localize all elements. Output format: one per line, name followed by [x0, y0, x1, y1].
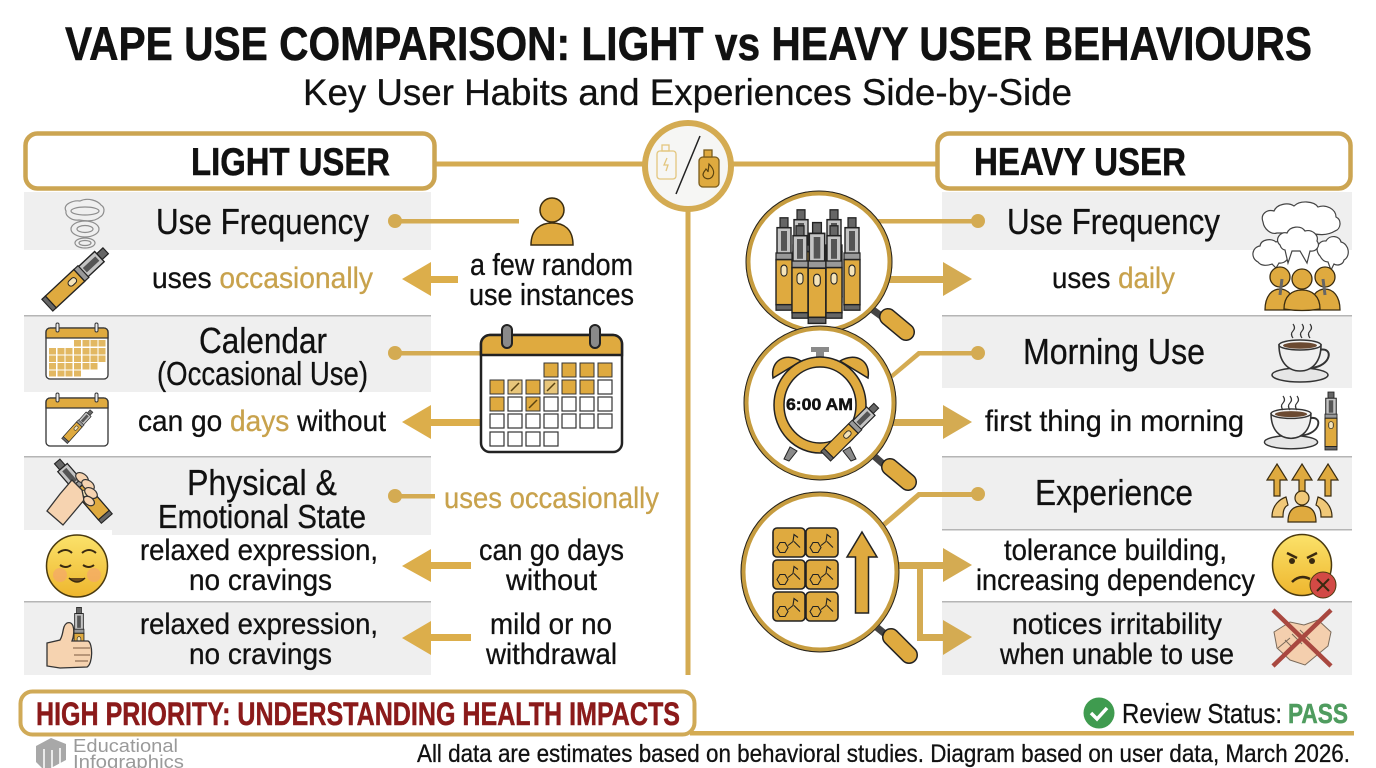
text: mild or no withdrawal [485, 608, 617, 671]
text: notices irritability: when unable to use [999, 638, 1234, 671]
text: tolerance building: increasing dependency [976, 564, 1255, 597]
icon: hand holding vape [47, 457, 112, 525]
left row 2: Calendar: Calendar [199, 320, 327, 361]
central spine and header connectors [433, 162, 938, 675]
left row 3: Physical & Emotional State [47, 457, 366, 535]
row bands right [942, 192, 1352, 675]
icon: central comparison badge [645, 123, 731, 209]
text: relaxed expression 1 [140, 534, 378, 597]
icon: thumbs up with vape [47, 607, 92, 668]
icon: rising arrows over people [1267, 464, 1338, 522]
left row 1: Use Frequency: Use Frequency [156, 201, 369, 242]
connector: frequency [388, 214, 519, 228]
text: relaxed expression 2: no cravings [189, 638, 332, 671]
text: a few random use instances: a few random [470, 247, 633, 282]
text: relaxed expression 2 [140, 608, 378, 671]
text: notices irritability [999, 608, 1234, 671]
text: a few random use instances: use instances [469, 277, 634, 312]
text: can go days without: can go days [479, 534, 624, 567]
row bands left [24, 192, 431, 675]
callout: high priority: HIGH PRIORITY: UNDERSTANDING HEALTH IMPACTS [36, 696, 680, 732]
footer rule [690, 731, 1354, 736]
right row 2: Morning Use: Morning Use [1023, 331, 1205, 372]
text: first thing in morning: first thing in morning [985, 405, 1244, 438]
magnifier 3: molecule tiles and rising arrow [741, 492, 909, 655]
arrow: left 3 [402, 549, 471, 582]
text: mild or no withdrawal: withdrawal [485, 638, 617, 671]
text: mild or no withdrawal: mild or no [490, 608, 612, 641]
text: relaxed expression 1: no cravings [189, 564, 332, 597]
text: notices irritability: notices irritability [1012, 608, 1222, 641]
magnifier 2: alarm clock [744, 326, 908, 482]
left row 3: Physical & Emotional State: Emotional State [158, 498, 366, 535]
logo [36, 736, 184, 768]
text: uses daily: uses daily [1052, 262, 1175, 295]
review status: Review Status: [1122, 698, 1282, 729]
subtitle: Key User Habits and Experiences Side-by-Side [303, 72, 1072, 113]
right connectors and arrows [878, 214, 985, 655]
callout: high priority [20, 692, 694, 734]
icon: person [531, 198, 573, 245]
arrow: left 4 [402, 621, 471, 655]
icon: small gold calendar [46, 323, 108, 379]
header: light user: LIGHT USER [191, 141, 390, 184]
text: can go days without [479, 534, 624, 597]
left row 2: Calendar: (Occasional Use) [157, 355, 368, 392]
text: a few random use instances [469, 247, 634, 312]
left row 3: Physical & Emotional State: Physical & [187, 462, 337, 503]
magnifier 2: alarm clock: 6:00 AM [786, 395, 853, 414]
text: can go days without: without [505, 564, 598, 597]
icon: crossed-out handshake [1273, 610, 1331, 666]
header: heavy user [938, 134, 1350, 188]
connector: calendar [388, 346, 485, 360]
icon: large calendar [481, 325, 622, 452]
icon: relaxed face [46, 535, 108, 597]
text: relaxed expression 2: relaxed expression, [140, 608, 378, 641]
icon: clouds and group of users [1253, 202, 1348, 310]
text: tolerance building [976, 534, 1255, 597]
icon: coffee and vape [1264, 392, 1337, 450]
left row 1: Use Frequency [65, 199, 369, 248]
icon: irritated face with x badge [1272, 534, 1336, 598]
right row 1: Use Frequency: Use Frequency [1007, 201, 1220, 242]
arrow: left 2 [402, 405, 482, 439]
header: heavy user: HEAVY USER [974, 141, 1186, 184]
logo: Educational [73, 736, 178, 756]
header: light user [26, 134, 434, 188]
icon: vape pen [42, 245, 111, 311]
connector: state [388, 489, 435, 503]
icon: steam rings [65, 199, 104, 248]
arrow: left 1 [402, 262, 458, 296]
review status: PASS [1288, 698, 1348, 729]
text: uses occasionally gold: uses occasionally [444, 482, 659, 515]
right row 3: Experience: Experience [1035, 472, 1193, 513]
review status [1084, 698, 1348, 729]
left row 2: Calendar [46, 320, 368, 392]
text: uses occasionally: uses occasionally [152, 262, 373, 295]
icon: coffee cup [1272, 324, 1329, 382]
text: can go days without: can go days without [138, 405, 387, 438]
text: relaxed expression 1: relaxed expression, [140, 534, 378, 567]
magnifier 1: vape group [746, 191, 906, 333]
text: tolerance building: tolerance building, [1004, 534, 1227, 567]
icon: calendar with pen [46, 393, 108, 446]
